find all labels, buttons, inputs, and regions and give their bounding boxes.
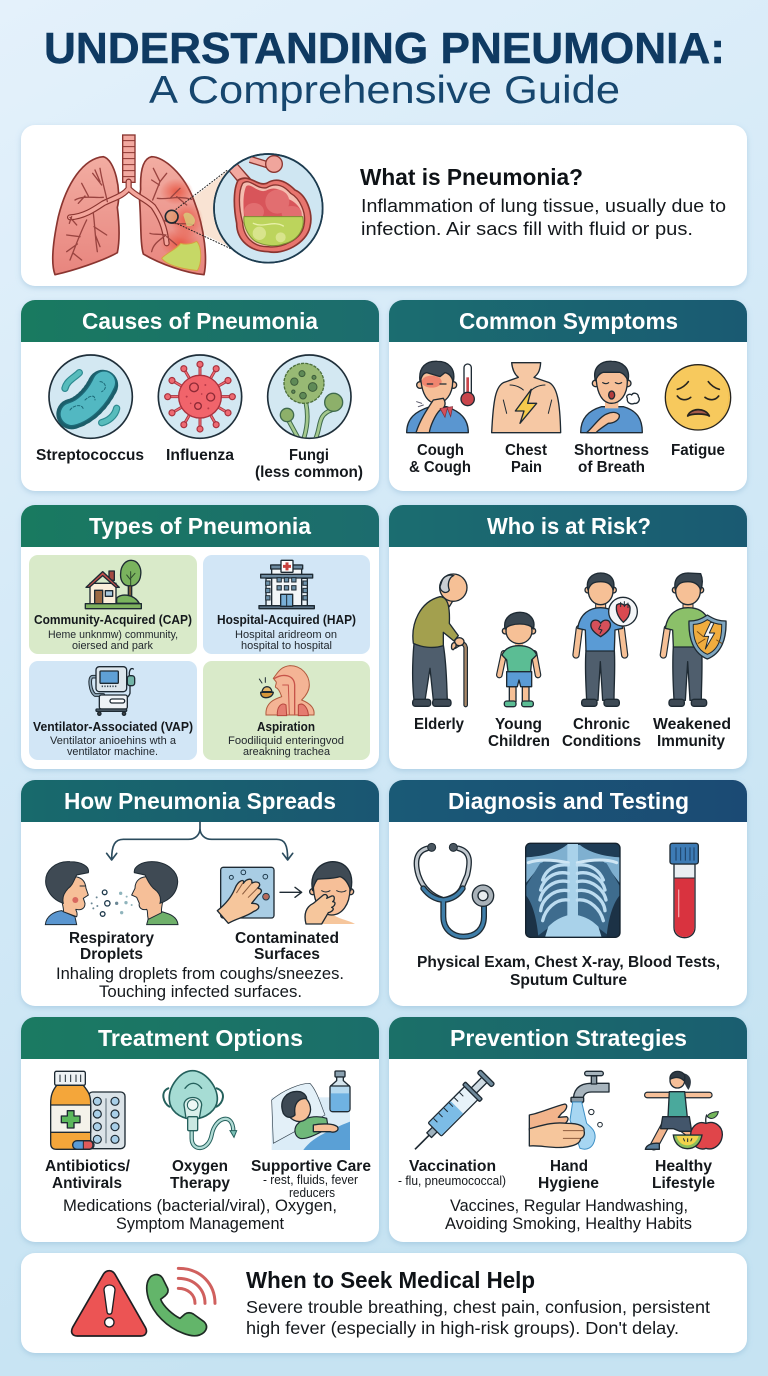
labels: causes: (less common)	[255, 464, 363, 481]
icon: chest x-ray	[526, 843, 620, 938]
text: diagnosis methods	[417, 954, 720, 989]
labels: symptoms: Fatigue	[671, 442, 725, 459]
text: VAP: ventilator machine.	[67, 746, 158, 758]
icon: aspiration anatomy	[259, 666, 314, 716]
icon: ventilator	[90, 667, 135, 715]
labels: prevention: Lifestyle	[652, 1175, 715, 1192]
text: HAP: Hospital aridreom on	[235, 629, 337, 641]
icon: respiratory droplets between two people	[45, 862, 178, 925]
labels: risk: Elderly	[414, 716, 464, 733]
panel: prevention	[389, 1017, 747, 1242]
labels: symptoms: & Cough	[409, 459, 471, 476]
labels: prevention: Hygiene	[538, 1175, 599, 1192]
heading: risk: Who is at Risk?	[487, 513, 651, 539]
labels: prevention: Vaccination	[409, 1158, 496, 1175]
labels: risk: Weakened	[653, 716, 731, 733]
icon: chest pain	[492, 363, 561, 433]
labels: treatment	[45, 1158, 371, 1200]
text: treatment description: Medications (bacterial/viral), Oxygen,	[63, 1196, 337, 1215]
labels: spreads: Surfaces	[254, 946, 320, 963]
labels: treatment: Antivirals	[52, 1175, 122, 1192]
title: UNDERSTANDING PNEUMONIA:	[44, 24, 725, 73]
labels: symptoms: Shortness	[574, 442, 649, 459]
labels: symptoms: of Breath	[578, 459, 645, 476]
labels: causes: Streptococcus	[36, 447, 144, 464]
text: treatment description	[63, 1196, 337, 1233]
labels: causes	[36, 447, 363, 481]
labels: prevention: Hand	[550, 1158, 588, 1175]
labels: risk: Immunity	[657, 733, 725, 750]
text: aspiration	[228, 720, 344, 758]
icon: adult with chronic heart condition	[576, 573, 637, 706]
icon: exercise and healthy food	[645, 1071, 722, 1149]
panel: types	[21, 505, 379, 769]
heading: spreads: How Pneumonia Spreads	[64, 788, 336, 814]
text: definition: infection. Air sacs fill with fluid or pus.	[361, 218, 693, 239]
labels: spreads: Respiratory	[69, 930, 154, 947]
icon: syringe	[407, 1068, 496, 1158]
icon: shortness of breath	[581, 361, 642, 433]
panel: spreads	[21, 780, 379, 1006]
icon: medicine bottle and blister pack	[51, 1071, 125, 1149]
icon: hand washing under faucet	[529, 1071, 609, 1149]
icon: house and tree	[85, 560, 141, 609]
labels: spreads	[69, 930, 339, 963]
labels: symptoms: Pain	[511, 459, 542, 476]
icon: fatigue face	[665, 365, 731, 430]
icon: hospital	[259, 560, 314, 609]
labels: symptoms: Chest	[505, 442, 548, 459]
labels: spreads: Contaminated	[235, 930, 339, 947]
panel: who is at risk	[389, 505, 747, 769]
text: seek help description: Severe trouble breathing, chest pain, confusion, persistent	[246, 1297, 710, 1317]
labels: treatment: Therapy	[170, 1175, 230, 1192]
labels: risk: Conditions	[562, 733, 641, 750]
icon: phone with signal waves	[147, 1268, 215, 1336]
text: VAP: Ventilator anioehins wth a	[50, 735, 177, 747]
labels: prevention: - flu, pneumococcal)	[398, 1174, 506, 1188]
heading: causes: Causes of Pneumonia	[82, 308, 318, 334]
text: CAP: Heme unknmw) community,	[48, 629, 178, 641]
labels: causes: Fungi	[289, 447, 329, 464]
text: prevention description: Vaccines, Regular Handwashing,	[450, 1196, 688, 1215]
labels: symptoms	[409, 442, 725, 476]
panel: when to seek medical help	[21, 1253, 747, 1353]
labels: treatment: Supportive Care	[251, 1158, 371, 1175]
text: prevention description	[445, 1196, 692, 1233]
text: spread description	[56, 964, 344, 1001]
heading: seek help: When to Seek Medical Help	[246, 1267, 535, 1293]
labels: symptoms: Cough	[417, 442, 464, 459]
labels: treatment: reducers	[289, 1186, 335, 1200]
heading: what is pneumonia: What is Pneumonia?	[360, 164, 583, 190]
icon: stethoscope	[416, 843, 494, 937]
heading: types: Types of Pneumonia	[89, 513, 311, 539]
card: ventilator-associated	[29, 661, 197, 760]
icon: touching contaminated surface then face	[217, 862, 355, 924]
heading: prevention: Prevention Strategies	[450, 1025, 687, 1051]
card: community-acquired	[29, 555, 197, 654]
labels: treatment: Antibiotics/	[45, 1158, 131, 1175]
text: VAP: Ventilator-Associated (VAP)	[33, 720, 193, 734]
icon: young child	[499, 612, 538, 707]
text: aspiration: Foodiliquid enteringvod	[228, 735, 344, 747]
title	[44, 24, 725, 112]
text: CAP: Community-Acquired (CAP)	[34, 613, 192, 627]
arrows: branching connector	[107, 822, 293, 860]
heading: symptoms: Common Symptoms	[459, 308, 678, 334]
icon: warning triangle	[72, 1271, 146, 1336]
text: definition: Inflammation of lung tissue, usually due to	[361, 195, 726, 216]
text: CAP	[34, 613, 192, 652]
text: diagnosis methods: Physical Exam, Chest X-ray, Blood Tests,	[417, 954, 720, 971]
icon: elderly person	[413, 574, 467, 706]
icon: oxygen mask	[163, 1071, 237, 1148]
icon: fungi	[268, 355, 351, 440]
labels: treatment: - rest, fluids, fever	[263, 1173, 358, 1187]
text: aspiration: Aspiration	[257, 720, 315, 734]
labels: treatment: Oxygen	[172, 1158, 228, 1175]
text: treatment description: Symptom Management	[116, 1214, 284, 1233]
panel: symptoms	[389, 300, 747, 491]
panel: what is pneumonia	[21, 125, 747, 286]
icon: lungs with magnified alveolus	[53, 135, 323, 275]
text: seek help description: high fever (especially in high-risk groups). Don't delay.	[246, 1318, 679, 1338]
card: hospital-acquired	[203, 555, 370, 654]
text: spread description: Inhaling droplets from coughs/sneezes.	[56, 964, 344, 983]
icon: adult with weakened immunity shield	[663, 573, 726, 706]
labels: risk: Young	[495, 716, 542, 733]
text: HAP: hospital to hospital	[241, 640, 332, 652]
labels: risk: Children	[488, 733, 550, 750]
panel: causes	[21, 300, 379, 491]
text: CAP: oiersed and park	[72, 640, 153, 652]
icon: influenza virus	[158, 355, 242, 438]
title: A Comprehensive Guide	[149, 69, 620, 112]
labels: prevention: Healthy	[655, 1158, 712, 1175]
heading: treatment: Treatment Options	[98, 1025, 303, 1051]
labels: risk	[414, 716, 731, 750]
labels: prevention	[398, 1158, 715, 1192]
text: seek help description	[246, 1297, 710, 1338]
text: diagnosis methods: Sputum Culture	[510, 972, 627, 989]
icon: blood test tube	[670, 843, 698, 938]
icon: patient resting in bed	[272, 1071, 350, 1150]
labels: causes: Influenza	[166, 447, 234, 464]
icon: cough and fever	[407, 361, 474, 433]
icon: streptococcus	[49, 355, 132, 438]
heading: diagnosis: Diagnosis and Testing	[448, 788, 689, 814]
text: spread description: Touching infected surfaces.	[99, 982, 302, 1001]
text: HAP	[217, 613, 356, 652]
text: definition	[361, 195, 726, 239]
labels: risk: Chronic	[573, 716, 630, 733]
text: VAP	[33, 720, 193, 758]
panel: treatment	[21, 1017, 379, 1242]
labels: spreads: Droplets	[80, 946, 143, 963]
card: aspiration	[203, 661, 370, 760]
text: HAP: Hospital-Acquired (HAP)	[217, 613, 356, 627]
text: prevention description: Avoiding Smoking, Healthy Habits	[445, 1214, 692, 1233]
text: aspiration: areakning trachea	[243, 746, 331, 758]
panel: diagnosis	[389, 780, 747, 1006]
